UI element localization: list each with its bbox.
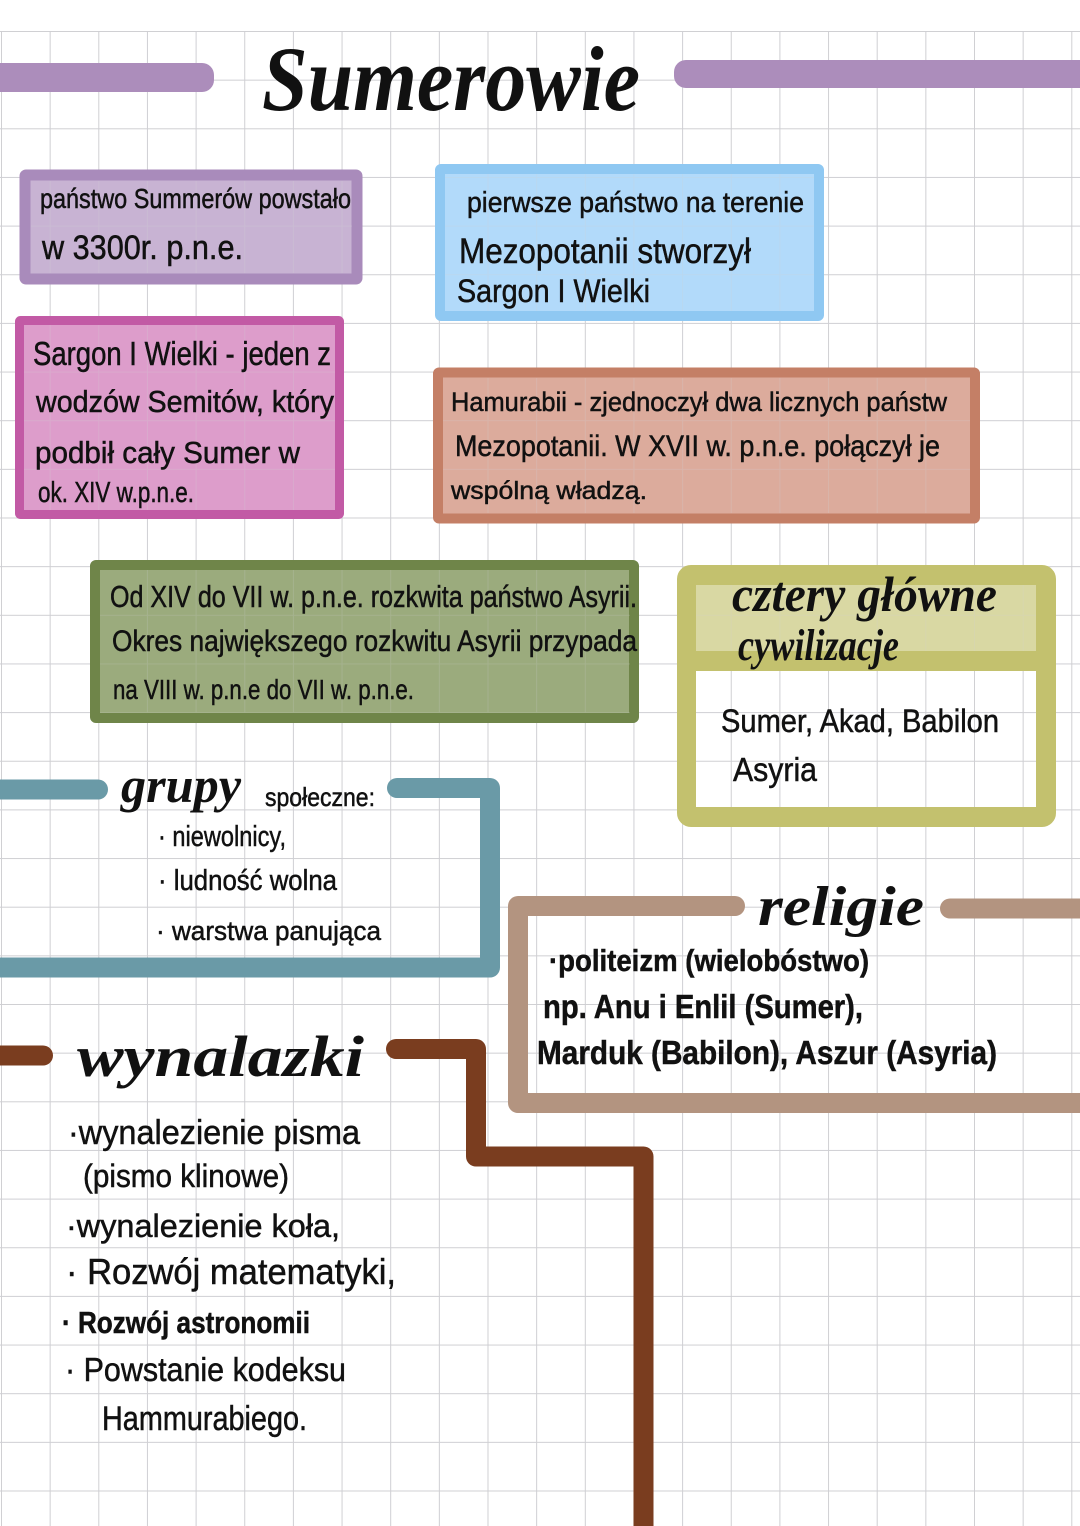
panel: Sargon: podbił cały Sumer w — [35, 435, 301, 470]
panel: Assyria — [95, 565, 637, 718]
panel: inventions: wynalazki — [77, 1024, 364, 1089]
panel: inventions: · Powstanie kodeksu — [65, 1351, 346, 1388]
title bar left — [0, 63, 214, 92]
panel: four civilisations: Sumer, Akad, Babilon — [721, 703, 999, 739]
panel: social groups: · ludność wolna — [158, 865, 338, 897]
panel: four civilisations: cztery główne — [732, 566, 997, 622]
panel: inventions: (pismo klinowe) — [83, 1158, 289, 1194]
panel: inventions: ·wynalezienie pisma — [68, 1114, 360, 1152]
panel: founding of Sumer — [25, 175, 357, 279]
panel: four civilisations — [687, 566, 1046, 817]
panel: social groups: grupy — [120, 757, 242, 813]
panel: Hammurabi — [438, 372, 975, 518]
panel: social groups: społeczne: — [265, 782, 375, 812]
panel: inventions: ·wynalezienie koła, — [66, 1208, 340, 1244]
panel: founding of Sumer: w 3300r. p.n.e. — [41, 229, 243, 267]
panel: religion: ·politeizm (wielobóstwo) — [549, 943, 869, 978]
panel: Hammurabi: Mezopotanii. W XVII w. p.n.e. połączył je — [455, 430, 940, 463]
panel: Hammurabi: wspólną władzą. — [450, 477, 647, 505]
title: Sumerowie — [262, 28, 640, 130]
panel: four civilisations: cywilizacje — [738, 621, 899, 670]
panel: first state: Mezopotanii stworzył — [459, 232, 751, 271]
panel: Sargon — [20, 320, 340, 514]
panel: first state: Sargon I Wielki — [457, 273, 650, 309]
panel: Sargon: ok. XIV w.p.n.e. — [38, 477, 194, 509]
panel: Assyria: na VIII w. p.n.e do VII w. p.n.e. — [113, 674, 414, 705]
panel: social groups: · niewolnicy, — [158, 821, 286, 853]
panel: religion: Marduk (Babilon), Aszur (Asyria) — [537, 1034, 997, 1071]
panel: religion — [518, 876, 1080, 1103]
panel: Assyria: Okres największego rozkwitu Asyrii przypada — [112, 625, 637, 658]
panel: first state — [440, 169, 819, 316]
panel: social groups — [0, 757, 490, 968]
panel: founding of Sumer: państwo Summerów powstało — [40, 183, 351, 214]
panel: Hammurabi: Hamurabii - zjednoczył dwa licznych państw — [451, 387, 947, 417]
panel: religion: religie — [758, 876, 924, 938]
panel: first state: pierwsze państwo na terenie — [467, 187, 804, 219]
panel: Assyria: Od XIV do VII w. p.n.e. rozkwita państwo Asyrii. — [110, 579, 637, 614]
panel: social groups: · warstwa panująca — [156, 916, 382, 946]
title bar right — [674, 60, 1080, 88]
panel: inventions: · Rozwój astronomii — [62, 1305, 310, 1340]
panel: four civilisations: Asyria — [733, 751, 818, 788]
panel: Sargon: wodzów Semitów, który — [35, 384, 334, 419]
panel: religion: np. Anu i Enlil (Sumer), — [543, 988, 863, 1025]
panel: inventions — [0, 1024, 644, 1526]
panel: inventions: · Rozwój matematyki, — [66, 1251, 396, 1292]
panel: inventions: Hammurabiego. — [102, 1400, 307, 1438]
panel: Sargon: Sargon I Wielki - jeden z — [33, 335, 331, 372]
